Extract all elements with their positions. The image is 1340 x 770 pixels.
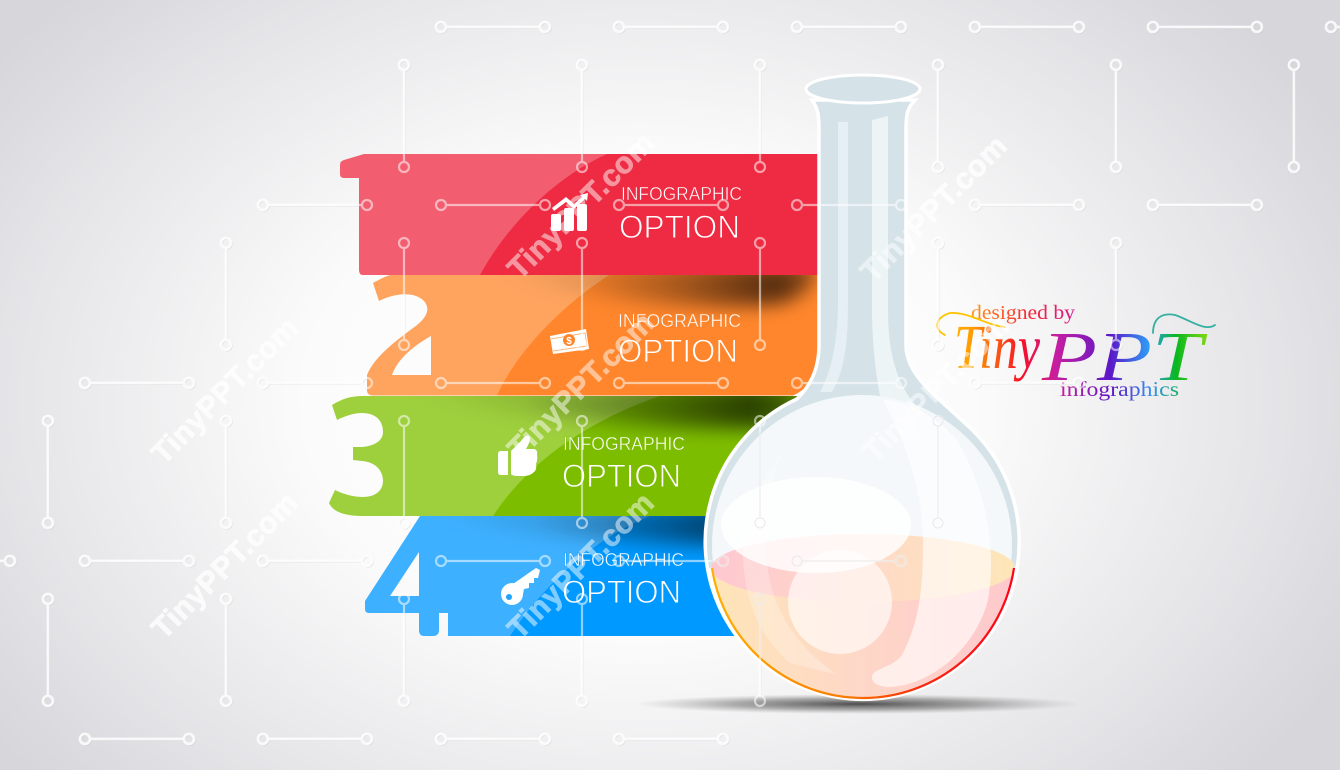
logo name PPT: PPT bbox=[1041, 319, 1209, 396]
text: infographic option 2: OPTION bbox=[618, 333, 738, 369]
left reflection bbox=[743, 450, 838, 675]
liquid bbox=[712, 534, 1014, 697]
floor shadow under flask bbox=[636, 694, 1080, 714]
right reflection bbox=[872, 400, 991, 687]
text: infographic option 1: OPTION bbox=[619, 209, 740, 245]
panel: option 4 blue bbox=[365, 516, 734, 636]
number 1 band shape bbox=[340, 154, 819, 275]
text: infographic option 3 bbox=[562, 434, 685, 494]
panel: option 2 orange bbox=[367, 265, 819, 396]
icon: dollar bills bbox=[550, 329, 589, 354]
flask glass body bbox=[705, 100, 1019, 699]
text: infographic option 2: INFOGRAPHIC bbox=[618, 311, 741, 331]
icon: key bbox=[501, 568, 540, 605]
upper white highlight bbox=[721, 477, 911, 573]
logo: designed by TinyPPT infographics bbox=[937, 302, 1215, 401]
darker area of band bbox=[497, 274, 819, 396]
text: infographic option 4: OPTION bbox=[562, 574, 681, 610]
darker area of band bbox=[510, 516, 800, 636]
number 4 band shape bbox=[365, 516, 740, 636]
neck highlights bbox=[820, 116, 915, 405]
flask bbox=[700, 75, 1025, 710]
icon: thumbs up bbox=[498, 436, 537, 476]
circular highlight bbox=[788, 550, 892, 654]
text: infographic option 4 bbox=[562, 550, 684, 610]
flask bulb interior bbox=[712, 395, 1012, 695]
icon: rising bar chart bbox=[551, 193, 588, 231]
icon: dollar bills: $ bbox=[566, 336, 572, 347]
darker area of band bbox=[493, 396, 800, 516]
darker area of band bbox=[480, 154, 819, 275]
logo caption top: designed by bbox=[971, 302, 1075, 324]
liquid outline bbox=[712, 568, 1014, 698]
logo name Tiny: Tiny bbox=[954, 314, 1040, 382]
glass edge around liquid bbox=[709, 568, 1017, 699]
text: infographic option 3: OPTION bbox=[562, 458, 681, 494]
panel: option 3 green bbox=[329, 386, 800, 516]
text: infographic option 2 bbox=[618, 311, 741, 369]
watermarks bbox=[146, 127, 1016, 646]
text: infographic option 1: INFOGRAPHIC bbox=[621, 184, 742, 204]
text: infographic option 1 bbox=[619, 184, 742, 245]
logo caption bottom: infographics bbox=[1060, 377, 1179, 401]
panel: option 1 red bbox=[340, 154, 819, 275]
number 2 band shape bbox=[367, 274, 819, 396]
number 3 band shape bbox=[329, 396, 800, 516]
flask rim bbox=[806, 75, 920, 103]
text: infographic option 4: INFOGRAPHIC bbox=[563, 550, 684, 570]
logo swashes bbox=[937, 313, 1215, 335]
text: infographic option 3: INFOGRAPHIC bbox=[563, 434, 685, 454]
